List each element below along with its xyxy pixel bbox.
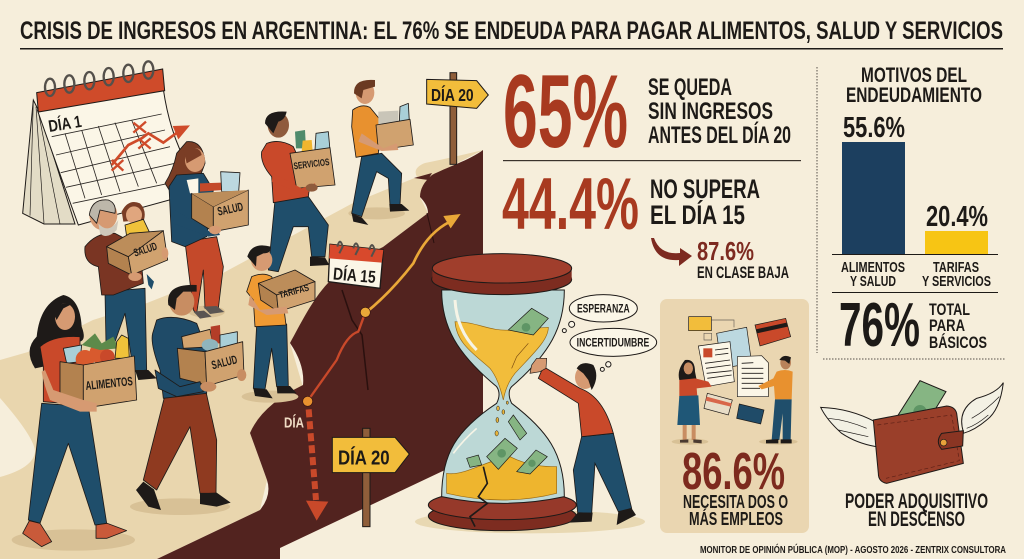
- person: boy with TARIFAS box: [242, 245, 315, 403]
- caption: poder adquisitivo: [845, 490, 988, 531]
- illustration: road and cliff: [0, 150, 483, 559]
- person: man with SERVICIOS box: [261, 111, 335, 272]
- bar: alimentos y salud: [841, 112, 905, 290]
- stat: 65%: SE QUEDA: [648, 74, 732, 101]
- bar: alimentos y salud: 55.6%: [843, 112, 905, 144]
- illustration: calendar with day 1: [23, 61, 190, 225]
- thought bubbles: ESPERANZA and INCERTIDUMBRE: [562, 295, 657, 371]
- person: man holding hourglass: [530, 358, 636, 525]
- label: needs two or more jobs: MÁS EMPLEOS: [689, 508, 783, 529]
- stat: 76% total: BÁSICOS: [929, 333, 987, 352]
- stat: 76% total: 76%: [839, 291, 920, 360]
- icon: winged wallet: [821, 381, 1003, 483]
- chart: debt reasons: [832, 64, 998, 293]
- illustration: hourglass with falling money: [415, 254, 645, 533]
- heading: motivos del endeudamiento: [846, 64, 982, 107]
- person: older man with child carrying SALUD box: [85, 200, 168, 380]
- calendar: DÍA 15: DÍA 15: [332, 263, 377, 287]
- panel: two jobs: [660, 299, 809, 533]
- heading: motivos del endeudamiento: MOTIVOS DEL: [861, 64, 967, 87]
- stat: 44.4%: EL DÍA 15: [650, 199, 745, 230]
- thought bubbles: ESPERANZA and INCERTIDUMBRE: INCERTIDUMBRE: [577, 337, 649, 350]
- person: man in hoodie with SALUD box: [130, 285, 246, 515]
- stat: 44.4%: 44.4%: [502, 164, 639, 245]
- person: older man with child carrying SALUD box: SALUD: [132, 241, 159, 260]
- illustration: calendar with day 1: DÍA 1: [47, 112, 83, 136]
- stat: 44.4%: [502, 164, 789, 282]
- arrow: income path up and falling: DÍA: [284, 414, 304, 431]
- sign: DÍA 20 top: DÍA 20: [431, 84, 474, 105]
- stat: 76% total: TOTAL: [929, 300, 970, 319]
- person: man with orange shirt near top: [348, 80, 413, 225]
- bar: alimentos y salud: Y SALUD: [850, 273, 896, 290]
- stat: 44.4%: 87.6%: [697, 236, 754, 266]
- person: woman with jacket carrying SALUD box: SALUD: [216, 199, 245, 219]
- calendar: DÍA 15: [328, 242, 383, 288]
- person: man in hoodie with SALUD box: SALUD: [210, 352, 239, 372]
- arrow: income path up and falling: [284, 214, 461, 521]
- sign: DÍA 20 top: [427, 73, 488, 164]
- person: boy with TARIFAS box: TARIFAS: [278, 283, 311, 301]
- person: man with SERVICIOS box: SERVICIOS: [293, 157, 330, 172]
- person: woman with ALIMENTOS box: [12, 295, 137, 551]
- icon: documents and workers: [672, 317, 798, 445]
- stat: 44.4%: EN CLASE BAJA: [697, 263, 789, 282]
- stat: 65%: SIN INGRESOS: [648, 98, 773, 125]
- bar: tarifas y servicios: Y SERVICIOS: [922, 273, 991, 290]
- label: needs two or more jobs: [683, 492, 788, 529]
- bar: tarifas y servicios: 20.4%: [926, 201, 988, 233]
- label: needs two or more jobs: NECESITA DOS O: [683, 492, 788, 512]
- bar: tarifas y servicios: TARIFAS: [933, 259, 979, 276]
- bar: tarifas y servicios: [922, 201, 991, 290]
- person: woman with jacket carrying SALUD box: [165, 142, 248, 319]
- stat: 44.4%: NO SUPERA: [650, 174, 760, 204]
- stat: 86.6%: 86.6%: [682, 443, 785, 501]
- caption: poder adquisitivo: EN DESCENSO: [868, 508, 965, 531]
- thought bubbles: ESPERANZA and INCERTIDUMBRE: ESPERANZA: [577, 303, 630, 316]
- stat: 65%: ANTES DEL DÍA 20: [648, 121, 791, 149]
- stat: 65%: 65%: [503, 54, 628, 170]
- bar: alimentos y salud: ALIMENTOS: [841, 259, 905, 276]
- sign: DÍA 20 bottom: [332, 428, 409, 527]
- person: woman with ALIMENTOS box: ALIMENTOS: [85, 374, 133, 393]
- sign: DÍA 20 bottom: DÍA 20: [338, 446, 390, 469]
- stat: 76% total: PARA: [929, 316, 965, 335]
